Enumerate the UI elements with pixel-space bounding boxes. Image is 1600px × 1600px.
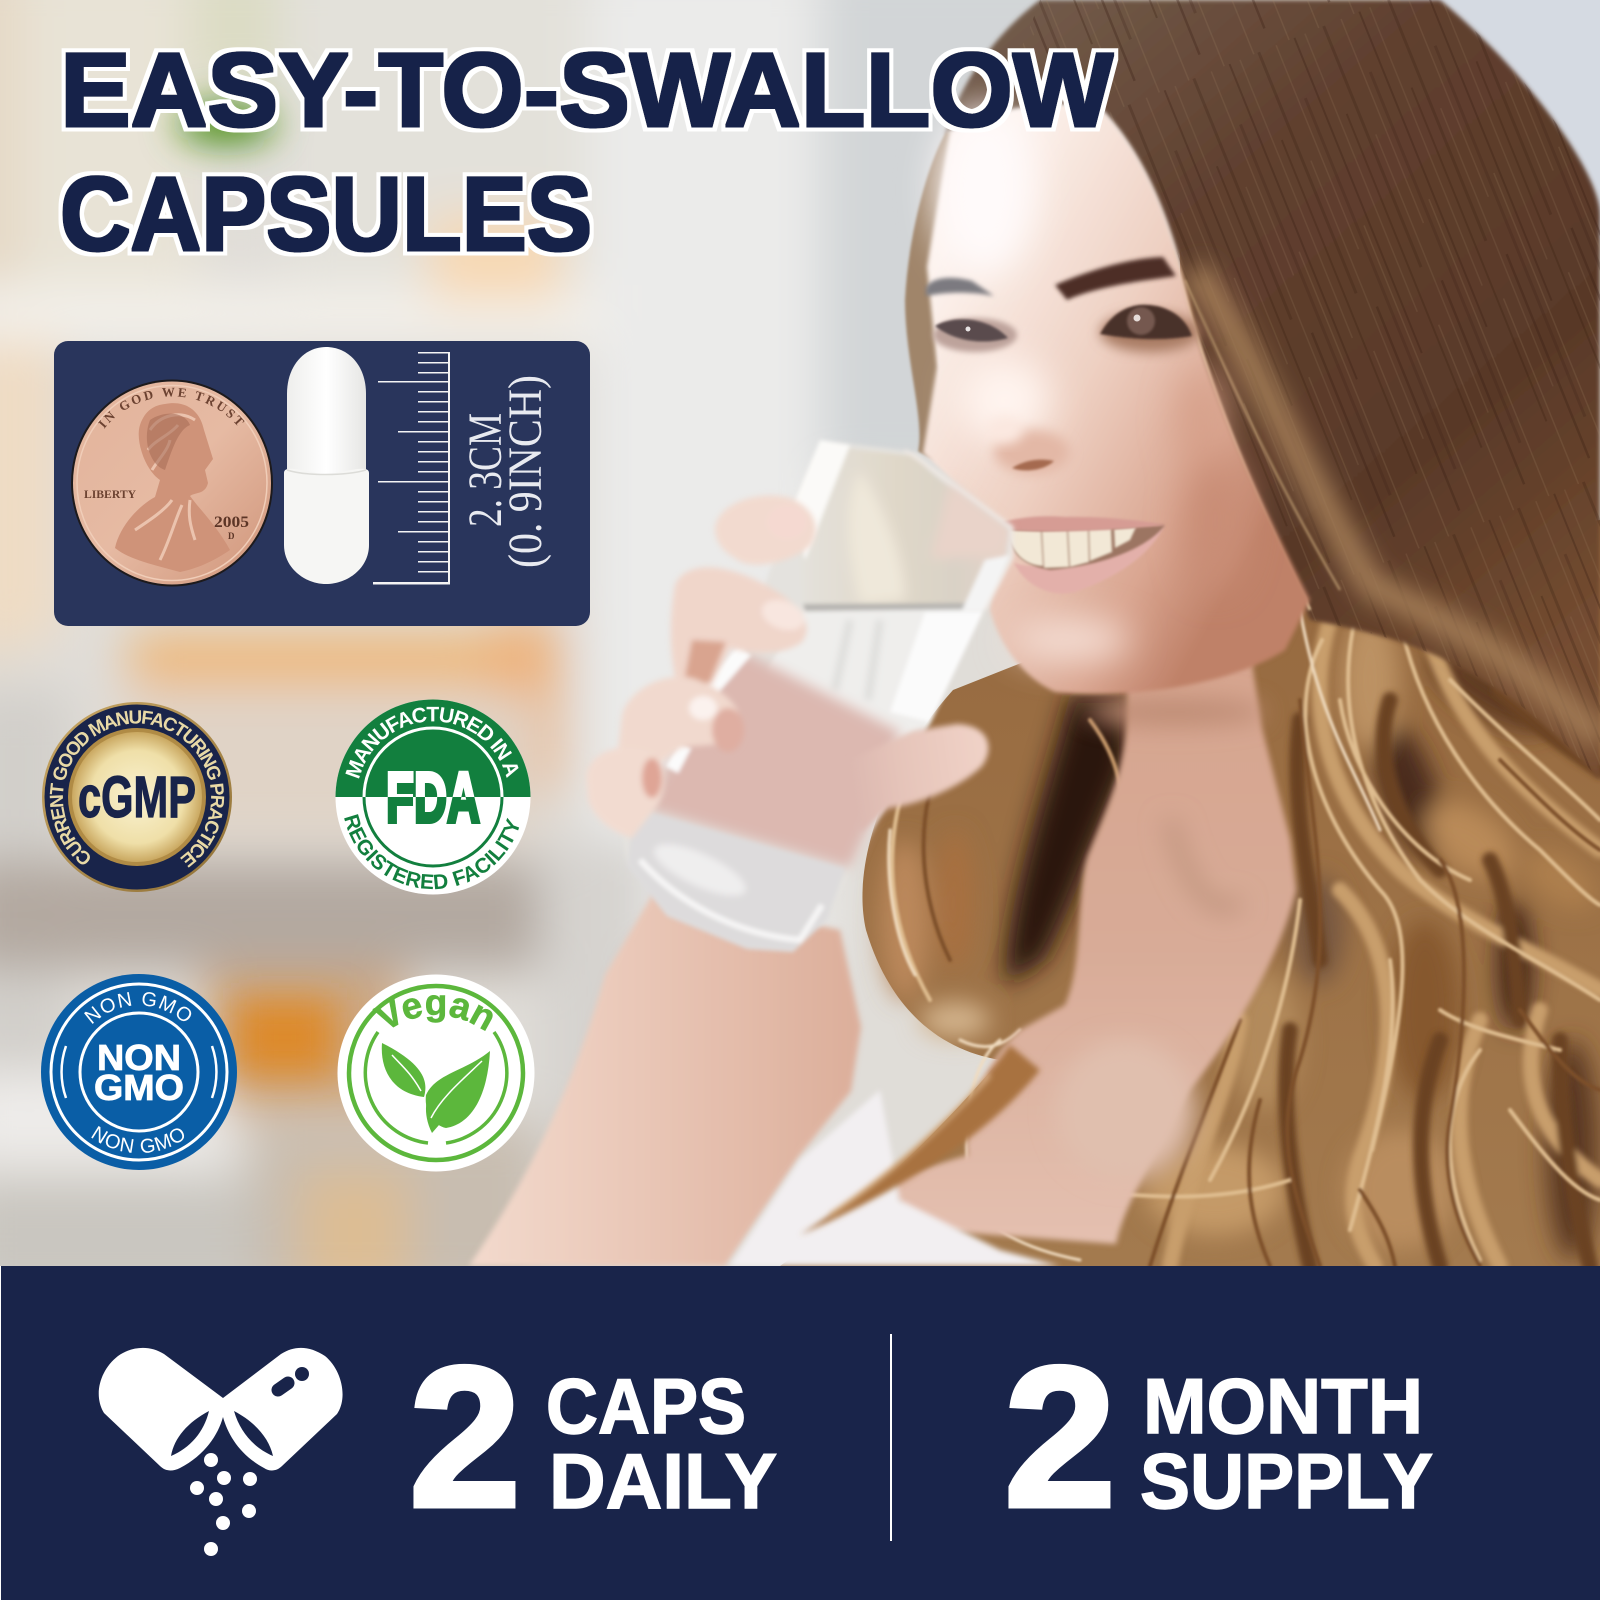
divider [890, 1334, 892, 1541]
penny coin: D [228, 531, 235, 541]
badge: NON GMO: GMO [94, 1067, 184, 1108]
arm [469, 890, 861, 1266]
neck shadow [1055, 698, 1265, 1180]
badge: FDA: FDA [386, 759, 480, 838]
badge: FDA: REGISTERED FACILITY [344, 814, 520, 890]
badge: cGMP: CURRENT GOOD MANUFACTURING PRACTICE [50, 710, 224, 868]
badge: Vegan [338, 974, 534, 1172]
left eye [933, 318, 1017, 352]
hand and fingers [586, 496, 988, 838]
stat: 2 caps daily: DAILY [549, 1437, 777, 1525]
stat: 2 caps daily: CAPS [546, 1362, 746, 1450]
stat: 2 month supply: MONTH [1143, 1362, 1423, 1450]
penny coin [71, 380, 273, 586]
penny coin: LIBERTY [84, 487, 136, 501]
hair: crown [905, 0, 1600, 780]
hair: lower waves [780, 250, 1600, 1266]
face [923, 105, 1310, 694]
capsule [284, 347, 369, 584]
panel: capsule size comparison [54, 341, 590, 626]
badge: NON GMO: NON [97, 1037, 181, 1078]
bottom band [1, 1266, 1600, 1600]
right eye [1100, 305, 1200, 352]
stat: 2 month supply [1004, 1326, 1433, 1549]
right eyebrow [1055, 257, 1176, 300]
glass of water [623, 440, 1013, 952]
fine strands [889, 600, 1600, 1266]
title line one: EASY-TO-SWALLOW [60, 32, 1113, 149]
badge: cGMP: cGMP [78, 765, 196, 830]
left eyebrow [926, 278, 994, 296]
icon: open capsule pouring powder [99, 1348, 343, 1556]
size label: 2. 3CM [459, 413, 512, 527]
title line two: CAPSULES [60, 156, 592, 273]
hair strands over chest [800, 1045, 1040, 1235]
ruler [373, 352, 450, 584]
size label: (0. 9INCH) [499, 375, 552, 568]
badge: FDA: MANUFACTURED IN A [345, 706, 518, 778]
stat: 2 month supply: SUPPLY [1140, 1437, 1433, 1525]
glass base [627, 812, 845, 952]
badge: NON GMO: NON GMO [84, 992, 192, 1024]
badge: NON GMO [41, 974, 237, 1170]
stat: 2 caps daily: 2 [409, 1326, 521, 1549]
badge: FDA [336, 700, 530, 894]
leaves [382, 1043, 490, 1133]
hand seen through glass [645, 650, 900, 868]
stat: 2 month supply: 2 [1004, 1326, 1116, 1549]
white garment glimpse [730, 1090, 1060, 1266]
neck and chest skin [894, 650, 1296, 1244]
nose [990, 424, 1070, 477]
stat: 2 caps daily [409, 1326, 777, 1549]
title [60, 32, 1113, 273]
mouth [995, 516, 1166, 593]
badge: Vegan: Vegan [372, 995, 493, 1031]
wide soft locks [1170, 620, 1600, 1266]
penny coin: 2005 [214, 514, 249, 531]
badge: NON GMO: NON GMO [91, 1126, 184, 1153]
size label [459, 375, 552, 568]
top-right wall corner [1442, 0, 1600, 202]
rim line [913, 456, 1016, 604]
penny coin: IN GOD WE TRUST [98, 388, 244, 429]
